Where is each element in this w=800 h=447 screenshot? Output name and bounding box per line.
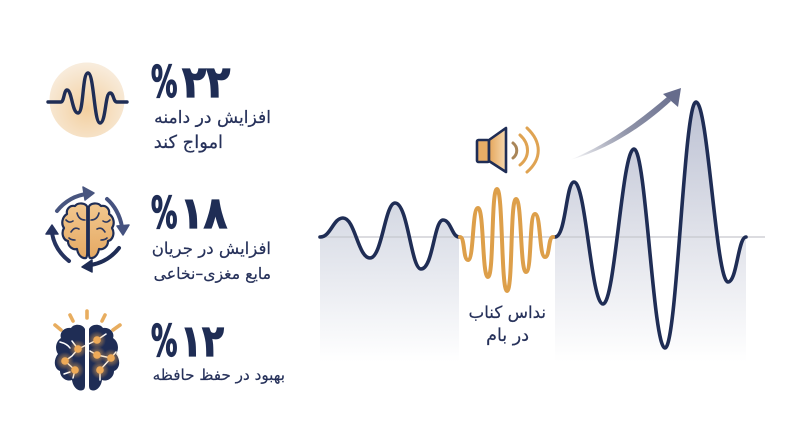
stat: 12 percent <box>151 315 224 367</box>
stat: 22 percent: % <box>151 56 177 108</box>
panel: cerebrospinal fluid stat <box>46 187 271 284</box>
text: memory label: بهبود در حفظ حافظه <box>153 366 285 384</box>
arrow: rising trend <box>570 88 681 160</box>
icon: wave in circle <box>48 62 127 138</box>
text: fluid label: مایع مغزی–نخاعی <box>154 264 271 284</box>
icon: glowing brain with rays <box>55 311 120 391</box>
text: amplitude label: افزایش در دامنه <box>154 108 271 128</box>
text: fluid label: افزایش در جریان <box>152 239 271 259</box>
stat: 12 percent: ۱۲ <box>180 317 224 367</box>
line: orange sound burst <box>460 189 553 291</box>
line: amplified wave <box>555 102 746 348</box>
panel: memory stat <box>55 311 285 391</box>
area: amplified wave fill <box>555 102 746 362</box>
text: fluid label <box>152 239 271 284</box>
stat: 18 percent: ۱۸ <box>180 188 227 239</box>
chart: brain wave amplification <box>320 88 765 362</box>
axis baseline <box>320 236 765 238</box>
icon: speaker <box>477 128 538 172</box>
text: sound label: در بام <box>486 326 529 346</box>
text: amplitude label <box>154 108 271 153</box>
stat: 18 percent <box>151 187 227 239</box>
line: slow wave <box>320 203 459 269</box>
icon: brain with circular arrows <box>46 187 129 272</box>
stat: 18 percent: % <box>151 187 177 239</box>
area: slow wave fill <box>320 203 459 362</box>
stat: 22 percent: ۲۲ <box>182 56 231 108</box>
text: amplitude label: امواج کند <box>154 132 223 153</box>
text: sound label: نداس کناب <box>468 302 546 322</box>
text: sound label <box>468 302 546 346</box>
panel: slow wave amplitude stat <box>48 56 271 153</box>
stat: 12 percent: % <box>151 315 177 367</box>
stat: 22 percent <box>151 56 231 108</box>
